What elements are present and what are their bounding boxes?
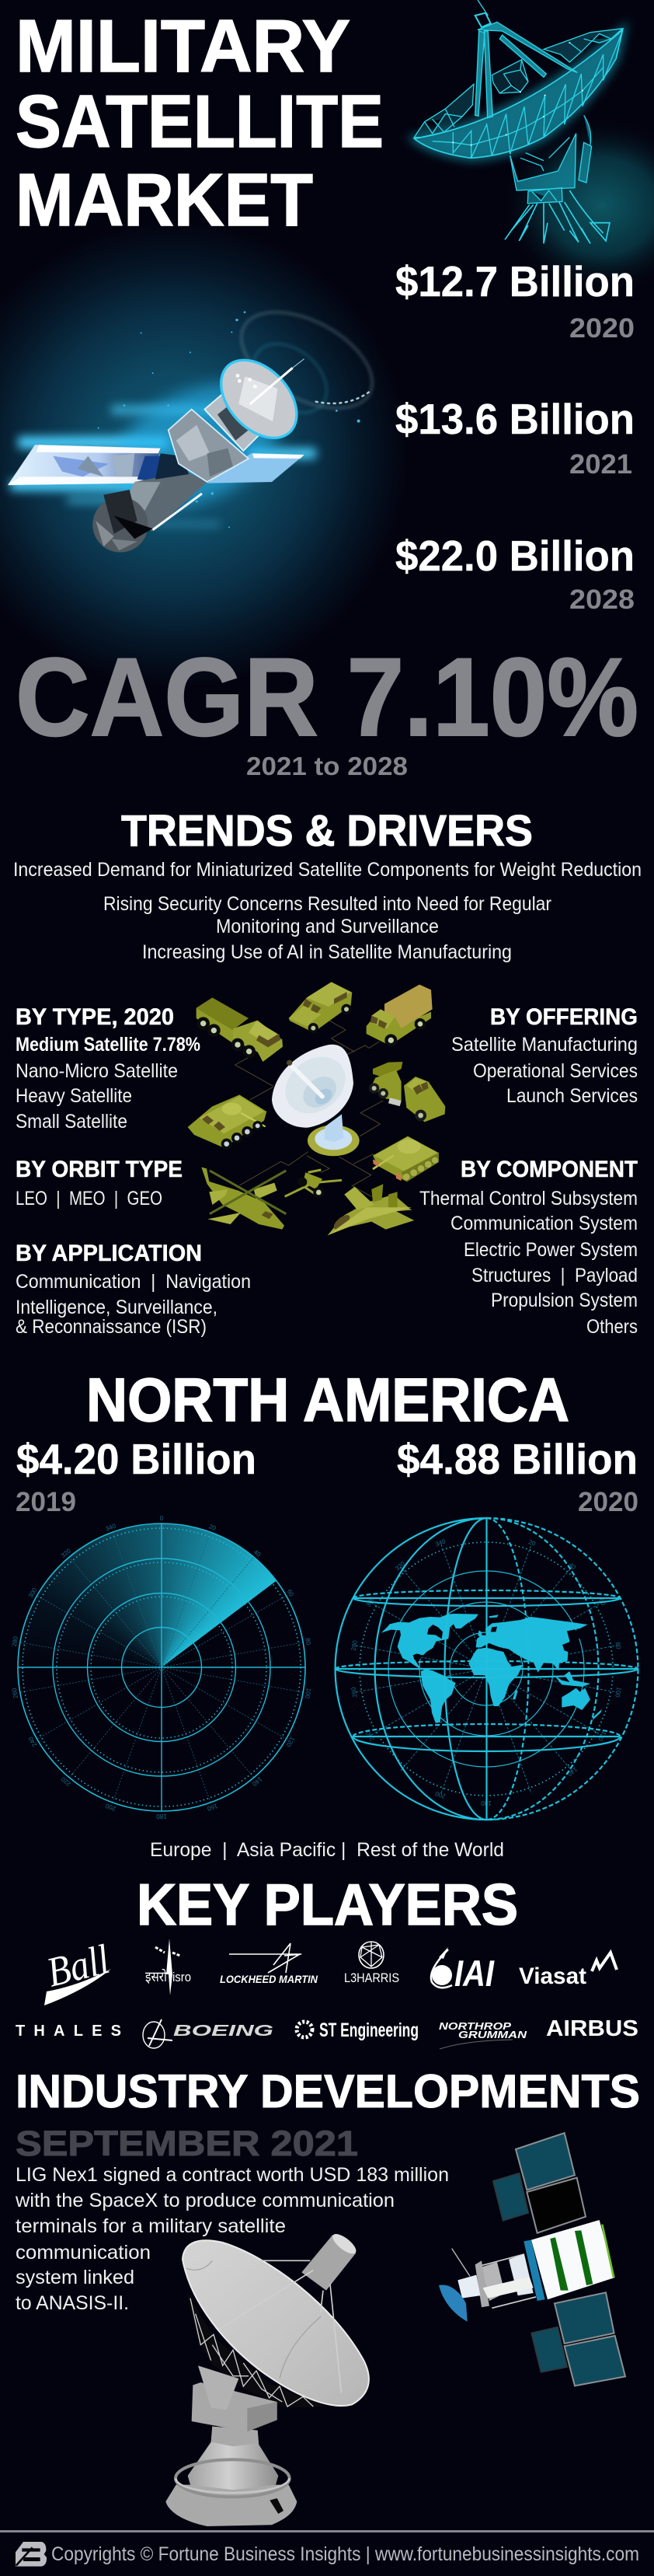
inner radar rings: 20 bbox=[527, 1538, 537, 1548]
market value 2028: $22.0 Billion bbox=[395, 532, 635, 580]
panel: by application: Intelligence, Surveillance, bbox=[16, 1297, 217, 1318]
solar panels bbox=[8, 445, 161, 485]
panel: by offering: Satellite Manufacturing bbox=[451, 1034, 638, 1056]
illustration: dish and military vehicles bbox=[188, 982, 445, 1235]
panel: by offering: BY OFFERING bbox=[490, 1004, 638, 1030]
divider: footer bbox=[0, 2530, 654, 2532]
chart: radar: 200 bbox=[104, 1802, 117, 1812]
illustration: grey ground dish bbox=[165, 2231, 369, 2526]
chart: radar: 240 bbox=[27, 1735, 38, 1748]
panel: by offering bbox=[451, 1004, 638, 1107]
text: development description: terminals for a military satellite bbox=[16, 2215, 286, 2237]
logo: Thales: THALES bbox=[16, 2023, 121, 2040]
text: development description: communication bbox=[16, 2242, 151, 2264]
panel: by application: Communication | Navigation bbox=[16, 1271, 251, 1293]
panel: by application: BY APPLICATION bbox=[16, 1241, 202, 1266]
panel: by type: Heavy Satellite bbox=[16, 1085, 132, 1107]
icon: cargo truck bbox=[197, 997, 283, 1062]
text: trends list bbox=[13, 859, 642, 963]
panel: by type bbox=[16, 1004, 200, 1133]
logo: IAI: IAI bbox=[454, 1953, 495, 1994]
value: north america 2019: $4.20 Billion bbox=[16, 1435, 256, 1483]
subheading: september 2021: SEPTEMBER 2021 bbox=[16, 2124, 358, 2163]
chart: radar bbox=[11, 1515, 312, 1820]
text: development description: system linked bbox=[16, 2267, 134, 2288]
satellite background glow bbox=[0, 222, 408, 688]
text: trends list: Increasing Use of AI in Satellite Manufacturing bbox=[142, 941, 512, 963]
market value 2020 bbox=[395, 257, 635, 344]
icon: wireframe satellite dish bbox=[414, 0, 623, 243]
inner radar rings bbox=[350, 1538, 622, 1806]
panel: by type: Nano-Micro Satellite bbox=[16, 1060, 178, 1082]
solar panels bbox=[493, 2133, 625, 2386]
chart: radar: 80 bbox=[304, 1638, 312, 1646]
CAGR: 2021 to 2028 bbox=[246, 752, 408, 780]
chart: radar: 40 bbox=[252, 1548, 263, 1559]
illustration: white and teal satellite bbox=[439, 2133, 625, 2386]
panel: by component: Communication System bbox=[450, 1213, 638, 1234]
dish face bbox=[183, 2240, 369, 2406]
satellite body bbox=[122, 472, 207, 531]
logo: Viasat bbox=[519, 1953, 617, 1989]
panel: by component: BY COMPONENT bbox=[461, 1157, 638, 1182]
icon: armoured vehicle bbox=[188, 1094, 266, 1150]
feed horn bbox=[186, 2231, 359, 2393]
chart: radar: 160 bbox=[206, 1802, 218, 1813]
chart: radar: 0 bbox=[160, 1515, 164, 1522]
icon: jeep bbox=[289, 982, 352, 1033]
logo: ISRO: इसरो bbox=[145, 1968, 167, 1984]
heading: trends and drivers: TRENDS & DRIVERS bbox=[121, 806, 533, 856]
dish background glow bbox=[501, 117, 654, 295]
chart: radar: 120 bbox=[284, 1736, 296, 1748]
chart: radar: 340 bbox=[105, 1522, 117, 1533]
logo: ST Engineering bbox=[297, 2019, 419, 2041]
market value 2021: 2021 bbox=[569, 449, 632, 480]
market value 2021 bbox=[395, 395, 635, 480]
globe wireframe bbox=[336, 1518, 638, 1820]
sparkle particles bbox=[98, 311, 360, 528]
chart: radar: 60 bbox=[286, 1588, 295, 1598]
logo: Northrop Grumman: NORTHROP bbox=[439, 2020, 511, 2032]
logo: Boeing: BOEING bbox=[173, 2023, 273, 2040]
panel: by orbit type: BY ORBIT TYPE bbox=[16, 1157, 183, 1182]
market value 2020: 2020 bbox=[569, 313, 635, 344]
panel: by type: Medium Satellite 7.78% bbox=[16, 1034, 200, 1056]
icon: helicopter bbox=[201, 1168, 286, 1230]
panel: by component: Structures | Payload bbox=[471, 1265, 638, 1286]
panel: by component: Thermal Control Subsystem bbox=[419, 1188, 638, 1209]
icon: glowing satellite bbox=[8, 292, 388, 553]
icon: covered truck bbox=[367, 985, 433, 1046]
heading: industry developments: INDUSTRY DEVELOPMENTS bbox=[16, 2065, 640, 2117]
heading: north america: NORTH AMERICA bbox=[86, 1365, 569, 1434]
icon: central white dish bbox=[272, 1045, 360, 1156]
inner radar rings: 40 bbox=[568, 1562, 578, 1572]
logo: IAI bbox=[431, 1947, 495, 1994]
text: development description: with the SpaceX to produce communication bbox=[15, 2190, 395, 2211]
inner radar rings: 180 bbox=[481, 1799, 492, 1806]
logo: L3Harris bbox=[344, 1942, 399, 1985]
logo: L3Harris: L3HARRIS bbox=[344, 1970, 399, 1985]
logo: ST Engineering: ST Engineering bbox=[319, 2019, 419, 2041]
heading: key players: KEY PLAYERS bbox=[137, 1872, 518, 1937]
logo: Northrop Grumman: GRUMMAN bbox=[458, 2029, 527, 2040]
panel: by type: BY TYPE, 2020 bbox=[16, 1004, 174, 1030]
title bbox=[16, 5, 384, 242]
logo: Viasat: Viasat bbox=[519, 1963, 586, 1989]
inner radar rings: 320 bbox=[394, 1560, 407, 1572]
text: trends list: Rising Security Concerns Resulted into Need for Regular bbox=[103, 893, 551, 915]
logo: Lockheed Martin: LOCKHEED MARTIN bbox=[220, 1973, 318, 1985]
chart: radar: 320 bbox=[60, 1547, 72, 1559]
radar sweep bbox=[18, 1524, 305, 1811]
title: MARKET bbox=[16, 159, 313, 242]
text: other regions: Europe | Asia Pacific | Rest of the World bbox=[150, 1839, 504, 1861]
market value 2021: $13.6 Billion bbox=[395, 395, 635, 443]
inner radar rings: 240 bbox=[364, 1730, 376, 1742]
icon: fortune business insights bbox=[16, 2542, 47, 2567]
icon: howitzer bbox=[285, 1170, 342, 1198]
panel: by component: Propulsion System bbox=[491, 1290, 638, 1311]
text: development description bbox=[15, 2164, 449, 2314]
value: north america 2019: 2019 bbox=[16, 1487, 76, 1517]
value: north america 2019 bbox=[16, 1435, 256, 1517]
inner radar rings: 120 bbox=[597, 1730, 608, 1743]
panel: by application: & Reconnaissance (ISR) bbox=[16, 1316, 207, 1338]
chart: radar: 180 bbox=[156, 1813, 167, 1820]
map inland seas bbox=[413, 1625, 580, 1667]
logo: Northrop Grumman bbox=[439, 2020, 527, 2049]
market value 2028: 2028 bbox=[569, 585, 635, 615]
panel: by component: Others bbox=[586, 1316, 638, 1338]
logo: ISRO bbox=[145, 1939, 191, 1995]
market value 2028 bbox=[395, 532, 635, 615]
chart: globe with world map bbox=[336, 1518, 638, 1820]
title: SATELLITE bbox=[16, 80, 384, 163]
icon: tank bbox=[373, 1136, 439, 1182]
inner radar rings: 260 bbox=[350, 1686, 359, 1698]
dish mount bbox=[165, 2365, 297, 2526]
logo: Boeing bbox=[143, 2019, 273, 2048]
value: north america 2020: $4.88 Billion bbox=[397, 1435, 638, 1483]
dish lattice bbox=[186, 2292, 326, 2407]
text: development description: LIG Nex1 signed a contract worth USD 183 million bbox=[16, 2164, 449, 2186]
antenna signal rings bbox=[226, 292, 388, 428]
value: north america 2020: 2020 bbox=[578, 1487, 638, 1517]
satellite bus bbox=[439, 2220, 615, 2322]
text: development description: to ANASIS-II. bbox=[16, 2292, 129, 2314]
icon: rocket launcher truck bbox=[369, 1062, 445, 1122]
value: north america 2020 bbox=[397, 1435, 638, 1517]
panel: by component: Electric Power System bbox=[464, 1239, 638, 1261]
chart: radar: 300 bbox=[27, 1586, 39, 1599]
panel: by offering: Launch Services bbox=[506, 1085, 638, 1107]
panel: by orbit type: LEO | MEO | GEO bbox=[16, 1188, 162, 1209]
title: MILITARY bbox=[16, 5, 350, 88]
panel: by application bbox=[16, 1241, 251, 1338]
inner radar rings: 340 bbox=[434, 1538, 447, 1548]
logo: Airbus: AIRBUS bbox=[546, 2016, 638, 2041]
panel: by type: Small Satellite bbox=[16, 1111, 127, 1133]
inner radar rings: 300 bbox=[364, 1595, 376, 1608]
chart: radar: 140 bbox=[251, 1775, 263, 1788]
inner radar rings: 60 bbox=[597, 1597, 607, 1607]
chart: radar: 220 bbox=[59, 1775, 72, 1787]
logo: Lockheed Martin bbox=[220, 1943, 318, 1985]
chart: radar: 260 bbox=[11, 1687, 19, 1699]
antenna sparkle arc bbox=[316, 391, 370, 403]
icon: fighter jet bbox=[328, 1184, 414, 1235]
inner radar rings: 280 bbox=[350, 1639, 359, 1651]
text: trends list: Monitoring and Surveillance bbox=[216, 916, 439, 937]
inner radar rings: 200 bbox=[434, 1789, 447, 1800]
panel: by orbit type bbox=[16, 1157, 183, 1209]
logo: Ball: Ball bbox=[42, 1935, 114, 1996]
panel: by offering: Operational Services bbox=[473, 1060, 638, 1082]
chart: radar: 100 bbox=[304, 1688, 312, 1699]
world map bbox=[381, 1614, 602, 1723]
chart: radar: 20 bbox=[208, 1523, 217, 1532]
inner radar rings: 140 bbox=[565, 1765, 579, 1778]
panel: by component bbox=[419, 1157, 638, 1338]
inner radar rings: 100 bbox=[614, 1687, 622, 1698]
inner radar rings: 80 bbox=[614, 1642, 622, 1650]
logo: ISRO: isro bbox=[172, 1970, 191, 1984]
chart: radar: 280 bbox=[11, 1635, 19, 1647]
market value 2020: $12.7 Billion bbox=[395, 257, 635, 305]
